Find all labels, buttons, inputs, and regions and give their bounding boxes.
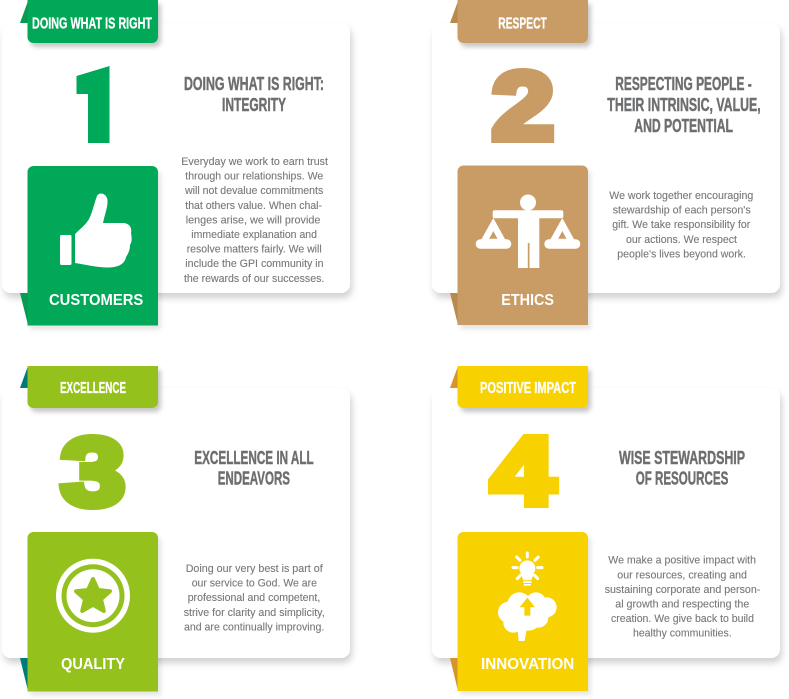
heading [607,74,761,136]
body text [609,190,753,260]
body text: people's lives beyond work. [617,248,746,260]
card background [432,23,780,293]
icon: star badge [56,559,130,633]
body text: stewardship of each person's [613,205,751,217]
bottom fold [20,293,28,325]
icon box [28,166,158,326]
bottom fold [450,293,458,325]
panel: doing what is right [2,0,350,326]
panel: excellence [2,366,350,692]
tag fold [450,1,458,23]
number 4: 4 [491,418,555,525]
heading [619,448,745,488]
body text: We make a positive impact with [608,555,756,567]
heading: OF RESOURCES [636,468,728,488]
body text: the rewards of our successes. [184,273,324,285]
box label: QUALITY [61,656,126,673]
heading [194,448,314,488]
body text: our actions. We respect [626,234,737,246]
icon: lightbulb over brain [498,553,557,641]
bottom fold [450,658,458,691]
heading: EXCELLENCE IN ALL [194,448,314,468]
body text: our resources, creating and [617,569,747,581]
body text: will not devalue commitments [184,185,324,197]
body text: lenges arise, we will provide [186,214,320,226]
body text: healthy communities. [633,628,732,640]
tag ribbon [28,366,158,408]
body text [184,563,325,633]
bottom fold [20,658,28,691]
tag label: EXCELLENCE [60,380,126,397]
body text [181,156,328,285]
icon box [458,532,588,691]
body text: through our relationships. We [185,171,323,183]
tag label: DOING WHAT IS RIGHT [32,16,152,32]
box label: INNOVATION [481,656,574,673]
tag label: POSITIVE IMPACT [480,380,576,397]
card background [2,388,350,658]
number 3: 3 [61,419,125,526]
body text: immediate explanation and [191,229,317,241]
heading [184,74,324,115]
icon: thumbs up [60,194,132,268]
body text: creation. We give back to build [611,613,754,625]
tag fold [450,366,458,388]
icon: person as scales [476,194,580,268]
heading: ENDEAVORS [218,468,290,488]
heading: DOING WHAT IS RIGHT: [184,74,324,94]
body text: and are continually improving. [184,621,324,633]
tag ribbon [28,0,158,43]
number 1: 1 [62,53,124,160]
heading: INTEGRITY [222,95,286,115]
panel: respect [432,0,780,325]
tag fold [20,1,28,23]
body text: We work together encouraging [609,190,753,202]
tag ribbon [458,0,588,43]
heading: AND POTENTIAL [634,116,733,136]
body text: Everyday we work to earn trust [181,156,328,168]
body text: that others value. When chal- [185,200,322,212]
body text: our service to God. We are [192,578,317,590]
body text: al growth and respecting the [615,598,749,610]
icon box [28,532,158,692]
card background [432,388,780,658]
body text: gift. We take responsibility for [612,219,751,231]
body text: Doing our very best is part of [186,563,324,575]
box label: ETHICS [501,292,554,309]
body text [605,555,761,640]
number 2: 2 [492,53,554,160]
box label: CUSTOMERS [49,292,143,309]
tag fold [20,366,28,388]
tag label: RESPECT [498,16,547,32]
icon box [458,166,588,325]
body text: strive for clarity and simplicity, [184,607,325,619]
tag ribbon [458,366,588,408]
body text: sustaining corporate and person- [605,584,761,596]
body text: resolve matters fairly. We will [187,244,322,256]
body text: include the GPI community in [185,258,324,270]
card background [2,23,350,293]
panel: positive impact [432,366,780,691]
body text: professional and competent, [188,592,320,604]
